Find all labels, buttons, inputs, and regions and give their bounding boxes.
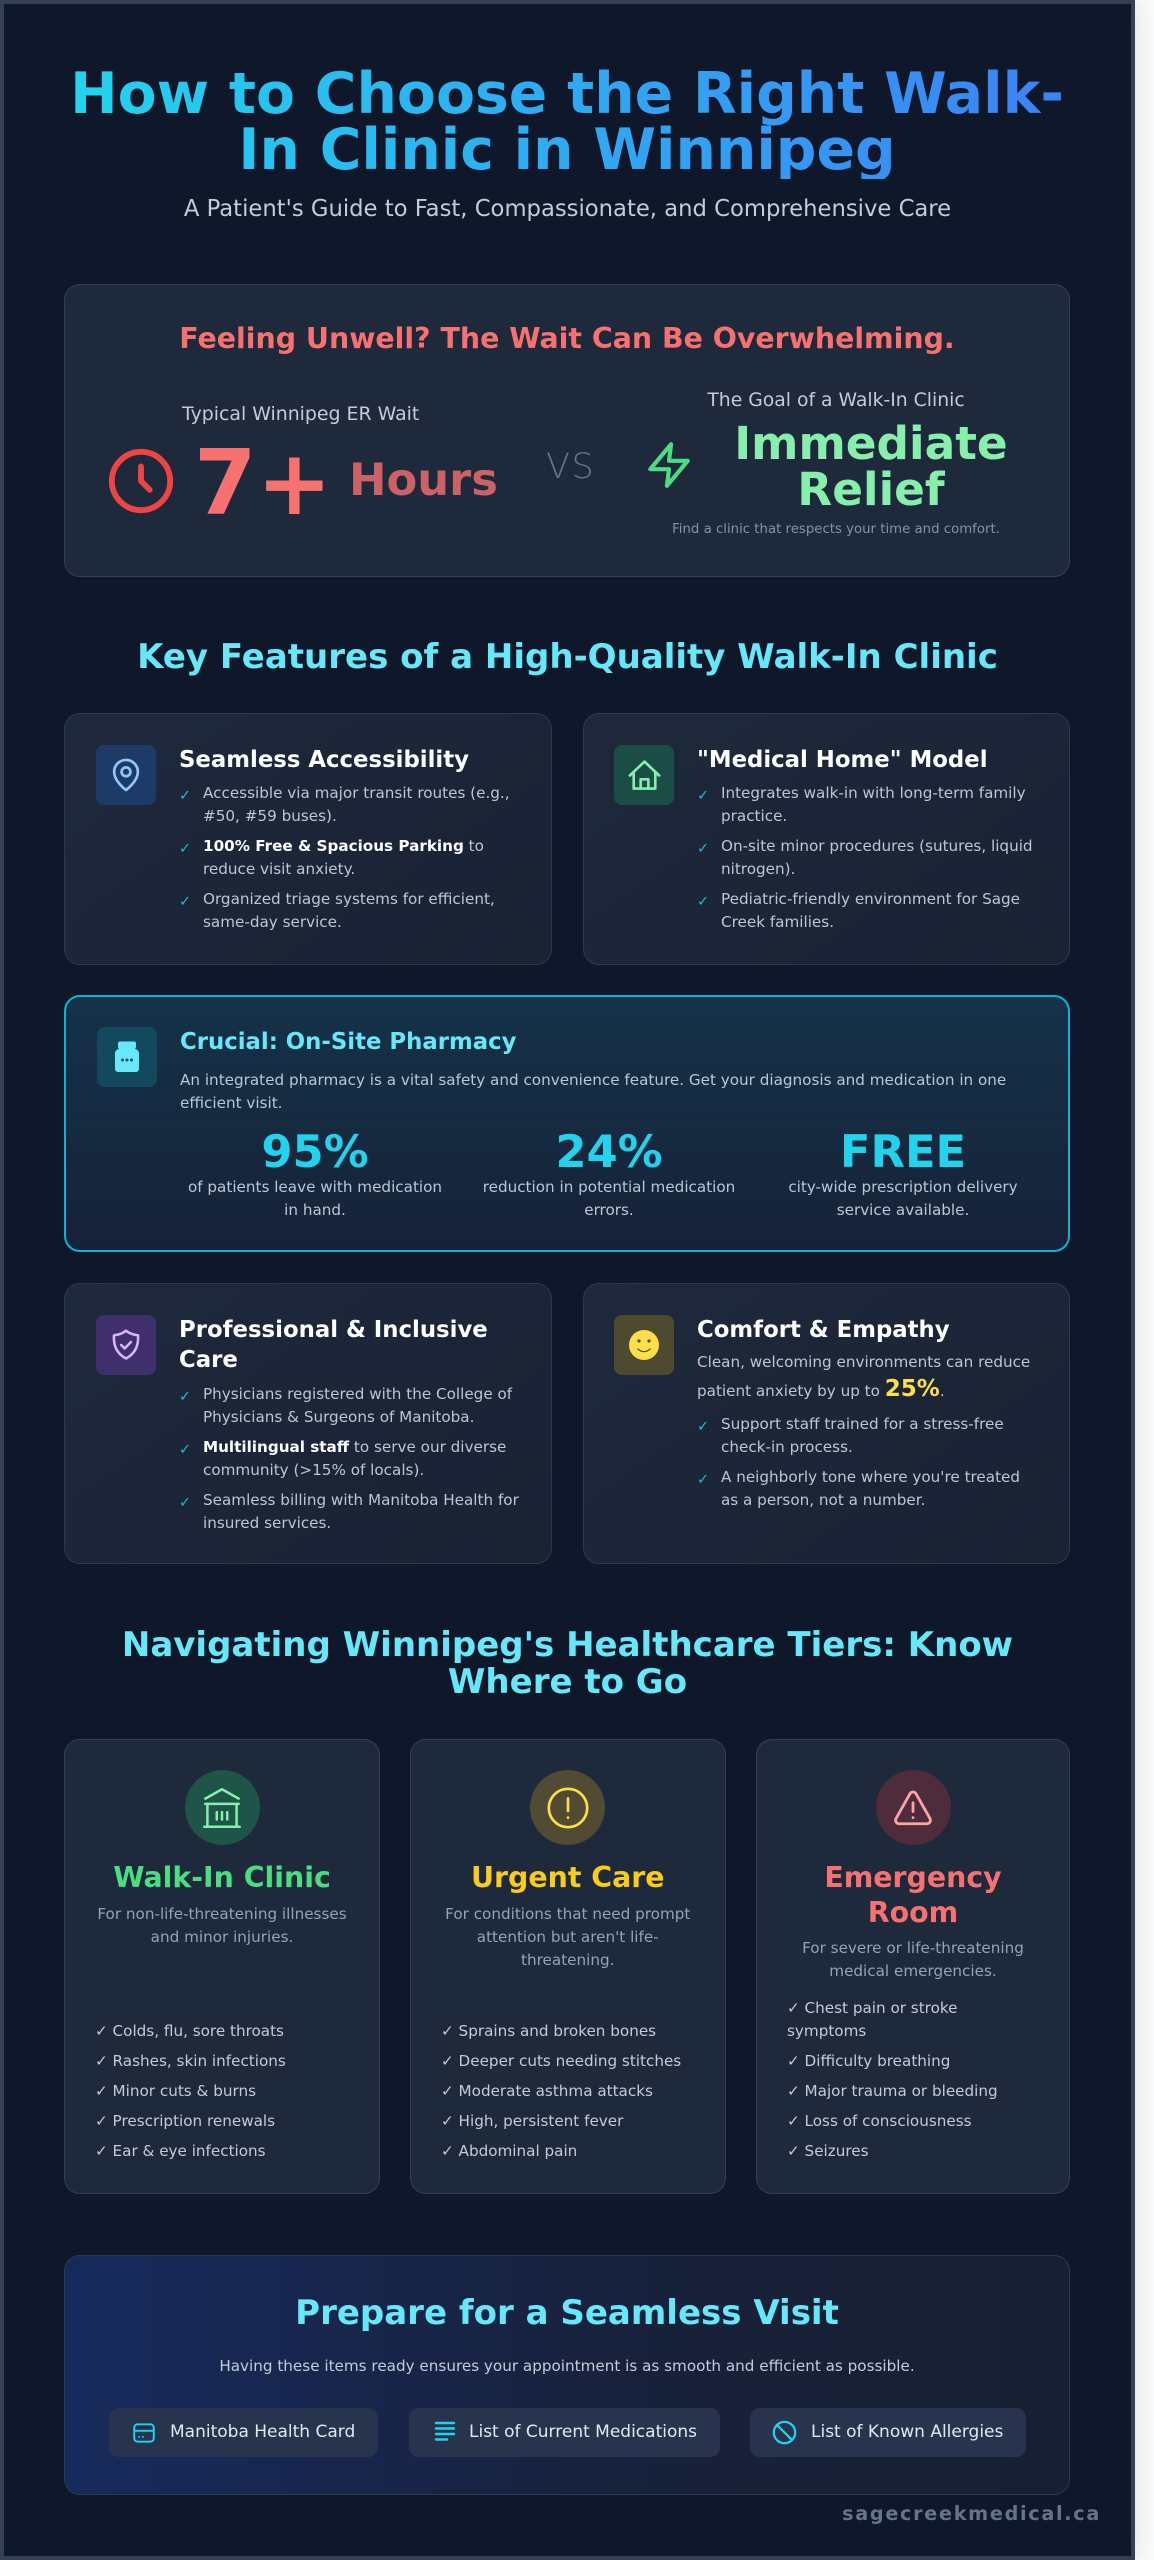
icon: lightning bolt — [648, 442, 690, 488]
feature list: Physicians registered with the College of Physicians & Surgeons of Manitoba. — [203, 1384, 512, 1426]
walk-in goal note: Find a clinic that respects your time and comfort. — [672, 522, 1000, 537]
stat: 24%: reduction in potential medication errors. — [483, 1178, 735, 1218]
icon: card — [133, 2423, 155, 2443]
panel: comfort and empathy — [583, 1283, 1070, 1564]
tier title: Emergency Room — [824, 1861, 1002, 1929]
panel heading: Feeling Unwell? The Wait Can Be Overwhelming. — [179, 322, 955, 354]
tier list: ✓ Moderate asthma attacks — [441, 2082, 653, 2100]
description: An integrated pharmacy is a vital safety and convenience feature. Get your diagnosis and medication in one efficient visit. — [180, 1070, 1006, 1112]
icon: clinic building — [184, 1770, 260, 1845]
heading: key features: Key Features of a High-Quality Walk-In Clinic — [137, 636, 998, 676]
tier list: ✓ Major trauma or bleeding — [787, 2082, 998, 2100]
feature list — [181, 784, 510, 931]
stat: 95% — [188, 1125, 442, 1218]
tier list: ✓ Deeper cuts needing stitches — [441, 2052, 681, 2070]
stat unit: hours: Hours — [349, 452, 498, 506]
panel: prepare for a visit — [64, 2255, 1070, 2495]
feature list: 100% Free & Spacious Parking to reduce visit anxiety. — [203, 837, 484, 878]
tier list: ✓ Chest pain or stroke — [787, 1999, 957, 2017]
card title: "Medical Home" Model — [697, 747, 988, 773]
stat: 95%: of patients leave with medication in hand. — [188, 1178, 442, 1218]
panel: ER wait vs walk-in — [64, 284, 1070, 577]
tier list: ✓ Seizures — [787, 2142, 869, 2160]
tier title: Walk-In Clinic — [113, 1861, 331, 1894]
tier list: ✓ Ear & eye infections — [95, 2142, 266, 2160]
tier list: ✓ Loss of consciousness — [787, 2112, 972, 2130]
feature list: Seamless billing with Manitoba Health for insured services. — [203, 1491, 519, 1532]
feature list: Integrates walk-in with long-term family practice. — [721, 784, 1026, 825]
immediate relief text: Immediate — [734, 417, 1008, 470]
feature list: Organized triage systems for efficient, same-day service. — [203, 890, 495, 931]
stat: 24%: 24% — [555, 1125, 663, 1178]
checklist item: allergies: List of Known Allergies — [811, 2422, 1003, 2442]
ER wait label: Typical Winnipeg ER Wait — [182, 403, 419, 425]
feature list — [181, 1384, 519, 1532]
tier list: ✓ Difficulty breathing — [787, 2052, 950, 2070]
immediate relief text — [734, 417, 1008, 516]
feature list — [699, 784, 1033, 931]
tier list — [787, 1999, 998, 2160]
tier list: ✓ High, persistent fever — [441, 2112, 623, 2130]
feature list — [699, 1415, 1020, 1509]
tier description: For severe or life-threatening medical emergencies. — [802, 1939, 1024, 1980]
footer website: sagecreekmedical.ca — [842, 2502, 1101, 2525]
immediate relief text: Relief — [797, 462, 945, 516]
icon: house — [614, 745, 674, 805]
icon: warning triangle — [876, 1770, 950, 1845]
heading: healthcare tiers: Navigating Winnipeg's Healthcare Tiers: Know Where to Go — [122, 1624, 1013, 1702]
icon: ban — [772, 2420, 796, 2444]
panel: emergency room tier — [756, 1739, 1070, 2194]
description with 25% highlight: Clean, welcoming environments can reduce patient anxiety by up to 25%. — [697, 1353, 1030, 1402]
title: In Clinic in Winnipeg — [238, 117, 896, 183]
tier list: ✓ Minor cuts & burns — [95, 2082, 256, 2100]
card title: Crucial: On-Site Pharmacy — [180, 1028, 516, 1054]
tier list — [441, 2022, 681, 2160]
tier description: For conditions that need prompt attention but aren't life-threatening. — [445, 1905, 690, 1969]
title — [64, 66, 1070, 178]
tier list: ✓ Sprains and broken bones — [441, 2022, 656, 2040]
icon: list — [434, 2422, 456, 2441]
tier list: ✓ Abdominal pain — [441, 2142, 577, 2160]
icon: exclamation circle — [530, 1770, 605, 1845]
icon: clock — [108, 448, 174, 514]
tier list: symptoms — [787, 2022, 866, 2040]
tier list: ✓ Prescription renewals — [95, 2112, 275, 2130]
title: How to Choose the Right Walk- — [70, 60, 1064, 126]
checklist item: health card: Manitoba Health Card — [170, 2422, 355, 2442]
tier list — [95, 2022, 286, 2160]
stat: free: FREE — [840, 1125, 966, 1178]
versus label: VS — [546, 447, 595, 487]
tier list: ✓ Colds, flu, sore throats — [95, 2022, 284, 2040]
tier list: ✓ Rashes, skin infections — [95, 2052, 286, 2070]
feature list: Support staff trained for a stress-free check-in process. — [721, 1415, 1004, 1456]
feature list: On-site minor procedures (sutures, liquid nitrogen). — [721, 837, 1033, 878]
panel: professional and inclusive care — [64, 1283, 552, 1564]
stat: free: city-wide prescription delivery service available. — [788, 1178, 1018, 1218]
panel: medical home model — [583, 713, 1070, 965]
description: Having these items ready ensures your appointment is as smooth and efficient as possible. — [219, 2356, 915, 2374]
panel: walk-in clinic tier — [64, 1739, 380, 2194]
stat: 95%: 95% — [261, 1125, 369, 1178]
card title: Professional & Inclusive Care — [179, 1317, 488, 1373]
panel heading: Prepare for a Seamless Visit — [295, 2293, 839, 2333]
feature list: Accessible via major transit routes (e.g., #50, #59 buses). — [203, 784, 510, 825]
stat: 7+: 7+ — [194, 431, 332, 536]
feature list: A neighborly tone where you're treated as a person, not a number. — [721, 1468, 1020, 1509]
stat: free — [788, 1125, 1018, 1218]
icon: map pin — [96, 745, 156, 805]
panel: on-site pharmacy — [64, 995, 1070, 1252]
panel: urgent care tier — [410, 1739, 726, 2194]
tier description: For non-life-threatening illnesses and minor injuries. — [97, 1905, 347, 1946]
checklist item: medications: List of Current Medications — [469, 2422, 697, 2442]
subtitle: A Patient's Guide to Fast, Compassionate, and Comprehensive Care — [184, 196, 951, 222]
checklist item: medications — [409, 2408, 720, 2457]
checklist item: allergies — [750, 2408, 1026, 2457]
walk-in goal label: The Goal of a Walk-In Clinic — [707, 390, 965, 411]
icon: pill bottle — [97, 1027, 157, 1087]
card title: Comfort & Empathy — [697, 1317, 950, 1343]
stat: 24% — [483, 1125, 735, 1218]
icon: smiley — [614, 1315, 674, 1375]
checklist item: health card — [109, 2408, 378, 2457]
card title: Seamless Accessibility — [179, 747, 469, 773]
feature list: Multilingual staff to serve our diverse community (>15% of locals). — [203, 1438, 506, 1479]
feature list: Pediatric-friendly environment for Sage Creek families. — [721, 890, 1020, 931]
tier title: Urgent Care — [471, 1861, 665, 1894]
panel: seamless accessibility — [64, 713, 552, 965]
icon: shield check — [96, 1315, 156, 1375]
